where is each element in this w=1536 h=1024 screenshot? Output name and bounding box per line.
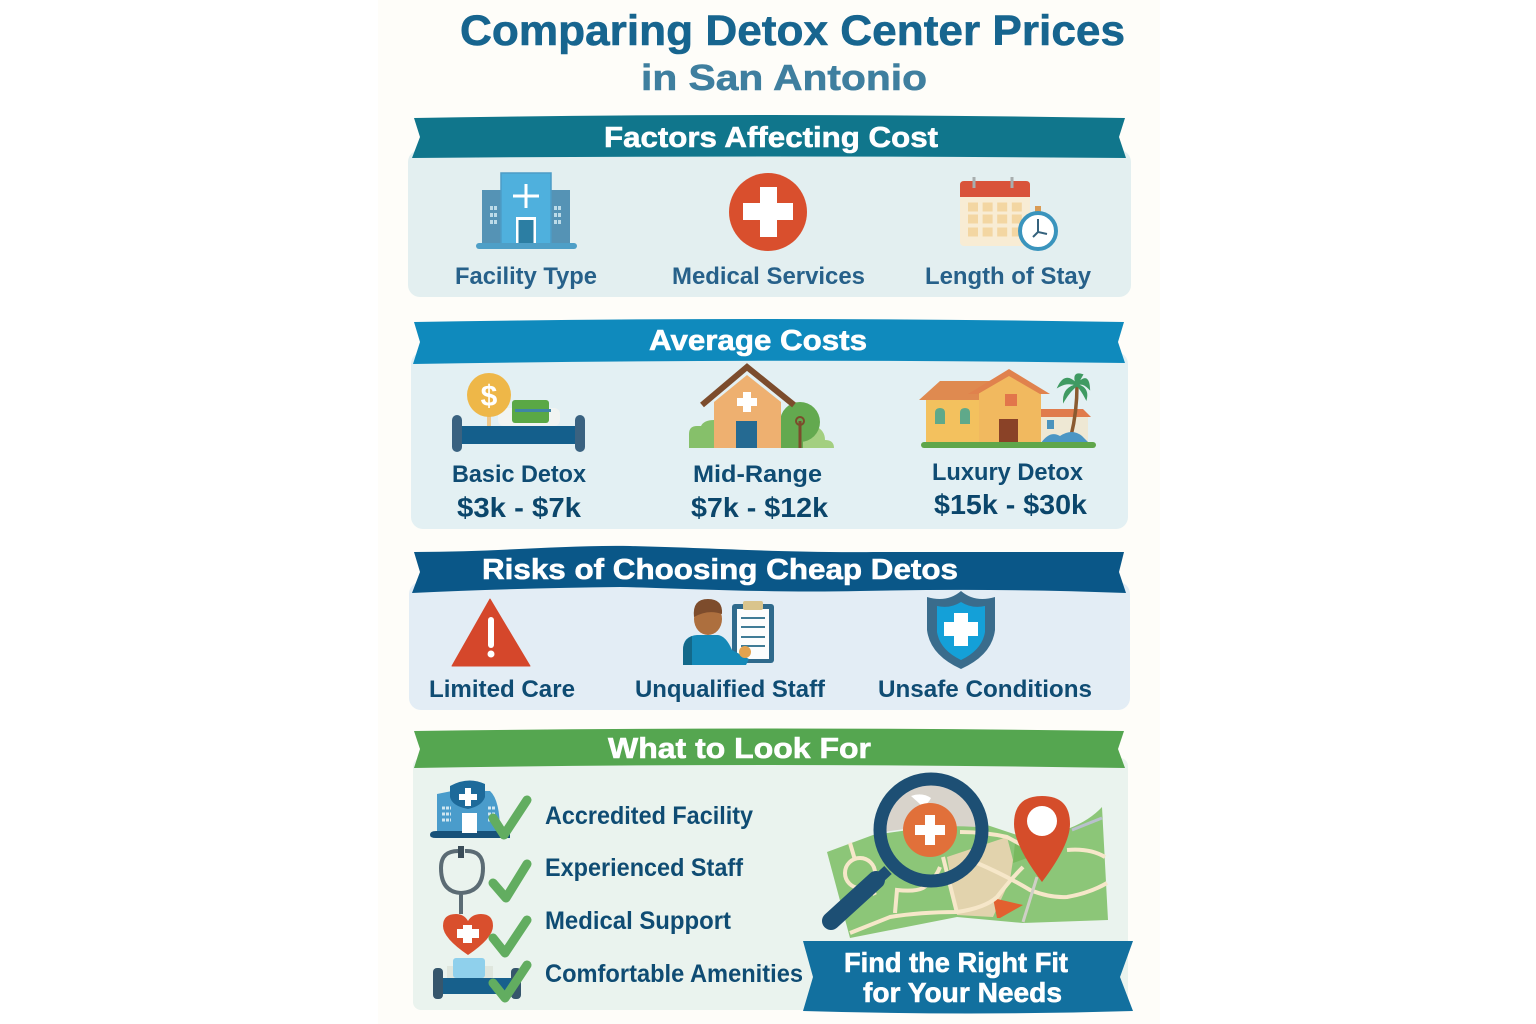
title (460, 7, 1125, 98)
label: basic detox: Basic Detox (452, 461, 587, 488)
icon: magnifying glass (831, 779, 982, 921)
icon: staff with clipboard (683, 599, 774, 665)
label: mid-range (691, 461, 828, 523)
title: Comparing Detox Center Prices (460, 7, 1125, 55)
banner: find the right fit: for Your Needs (863, 977, 1062, 1008)
checklist: comfortable amenities: Comfortable Amenities (545, 960, 803, 988)
banner: factors affecting cost (412, 115, 1126, 158)
banner: find the right fit (803, 941, 1133, 1014)
map illustration (827, 807, 1108, 938)
checklist: medical support (443, 907, 732, 955)
label: unsafe conditions: Unsafe Conditions (878, 676, 1092, 703)
banner: risks (412, 546, 1126, 593)
label: luxury detox (932, 459, 1087, 520)
icon: calendar and clock (960, 177, 1056, 249)
banner: risks: Risks of Choosing Cheap Detos (482, 554, 958, 586)
icon: medical cross (729, 173, 807, 251)
checklist: accredited facility (430, 780, 753, 838)
checklist: medical support: Medical Support (545, 907, 732, 935)
label: unqualified staff: Unqualified Staff (635, 676, 826, 703)
panel: what to look for (413, 728, 1133, 1014)
panel: average costs (411, 319, 1128, 529)
panel: factors affecting cost (408, 115, 1131, 297)
label: limited care: Limited Care (429, 676, 575, 703)
banner: factors affecting cost: Factors Affecting Cost (604, 122, 938, 154)
icon: shield (927, 591, 995, 669)
icon: map pin (1014, 796, 1070, 882)
label: basic detox: $3k - $7k (457, 492, 581, 523)
icon: hospital building (476, 173, 577, 249)
checklist: experienced staff (441, 846, 744, 914)
icon: luxury house with palm (919, 369, 1096, 448)
label: medical services: Medical Services (672, 263, 865, 290)
icon: basic detox bed with coin (452, 373, 585, 452)
banner: average costs: Average Costs (649, 325, 867, 357)
icon: basic detox bed with coin: $ (481, 380, 498, 413)
label: facility type: Facility Type (455, 263, 597, 290)
label: mid-range: $7k - $12k (691, 492, 828, 523)
icon: mid-range house (689, 367, 834, 448)
label: length of stay: Length of Stay (925, 263, 1092, 290)
label: mid-range: Mid-Range (693, 461, 822, 488)
label: basic detox (452, 461, 587, 523)
checklist: accredited facility: Accredited Facility (545, 802, 753, 830)
banner: average costs (413, 319, 1125, 364)
panel: risks of choosing cheap detox (409, 546, 1130, 710)
title: in San Antonio (641, 57, 927, 98)
banner: what to look for: What to Look For (608, 733, 871, 765)
banner: find the right fit: Find the Right Fit (844, 947, 1068, 978)
checklist: comfortable amenities (433, 958, 803, 999)
checklist: experienced staff: Experienced Staff (545, 854, 744, 882)
label: luxury detox: $15k - $30k (934, 489, 1087, 520)
icon: warning triangle (452, 599, 530, 666)
banner: what to look for (414, 728, 1125, 768)
label: luxury detox: Luxury Detox (932, 459, 1084, 486)
